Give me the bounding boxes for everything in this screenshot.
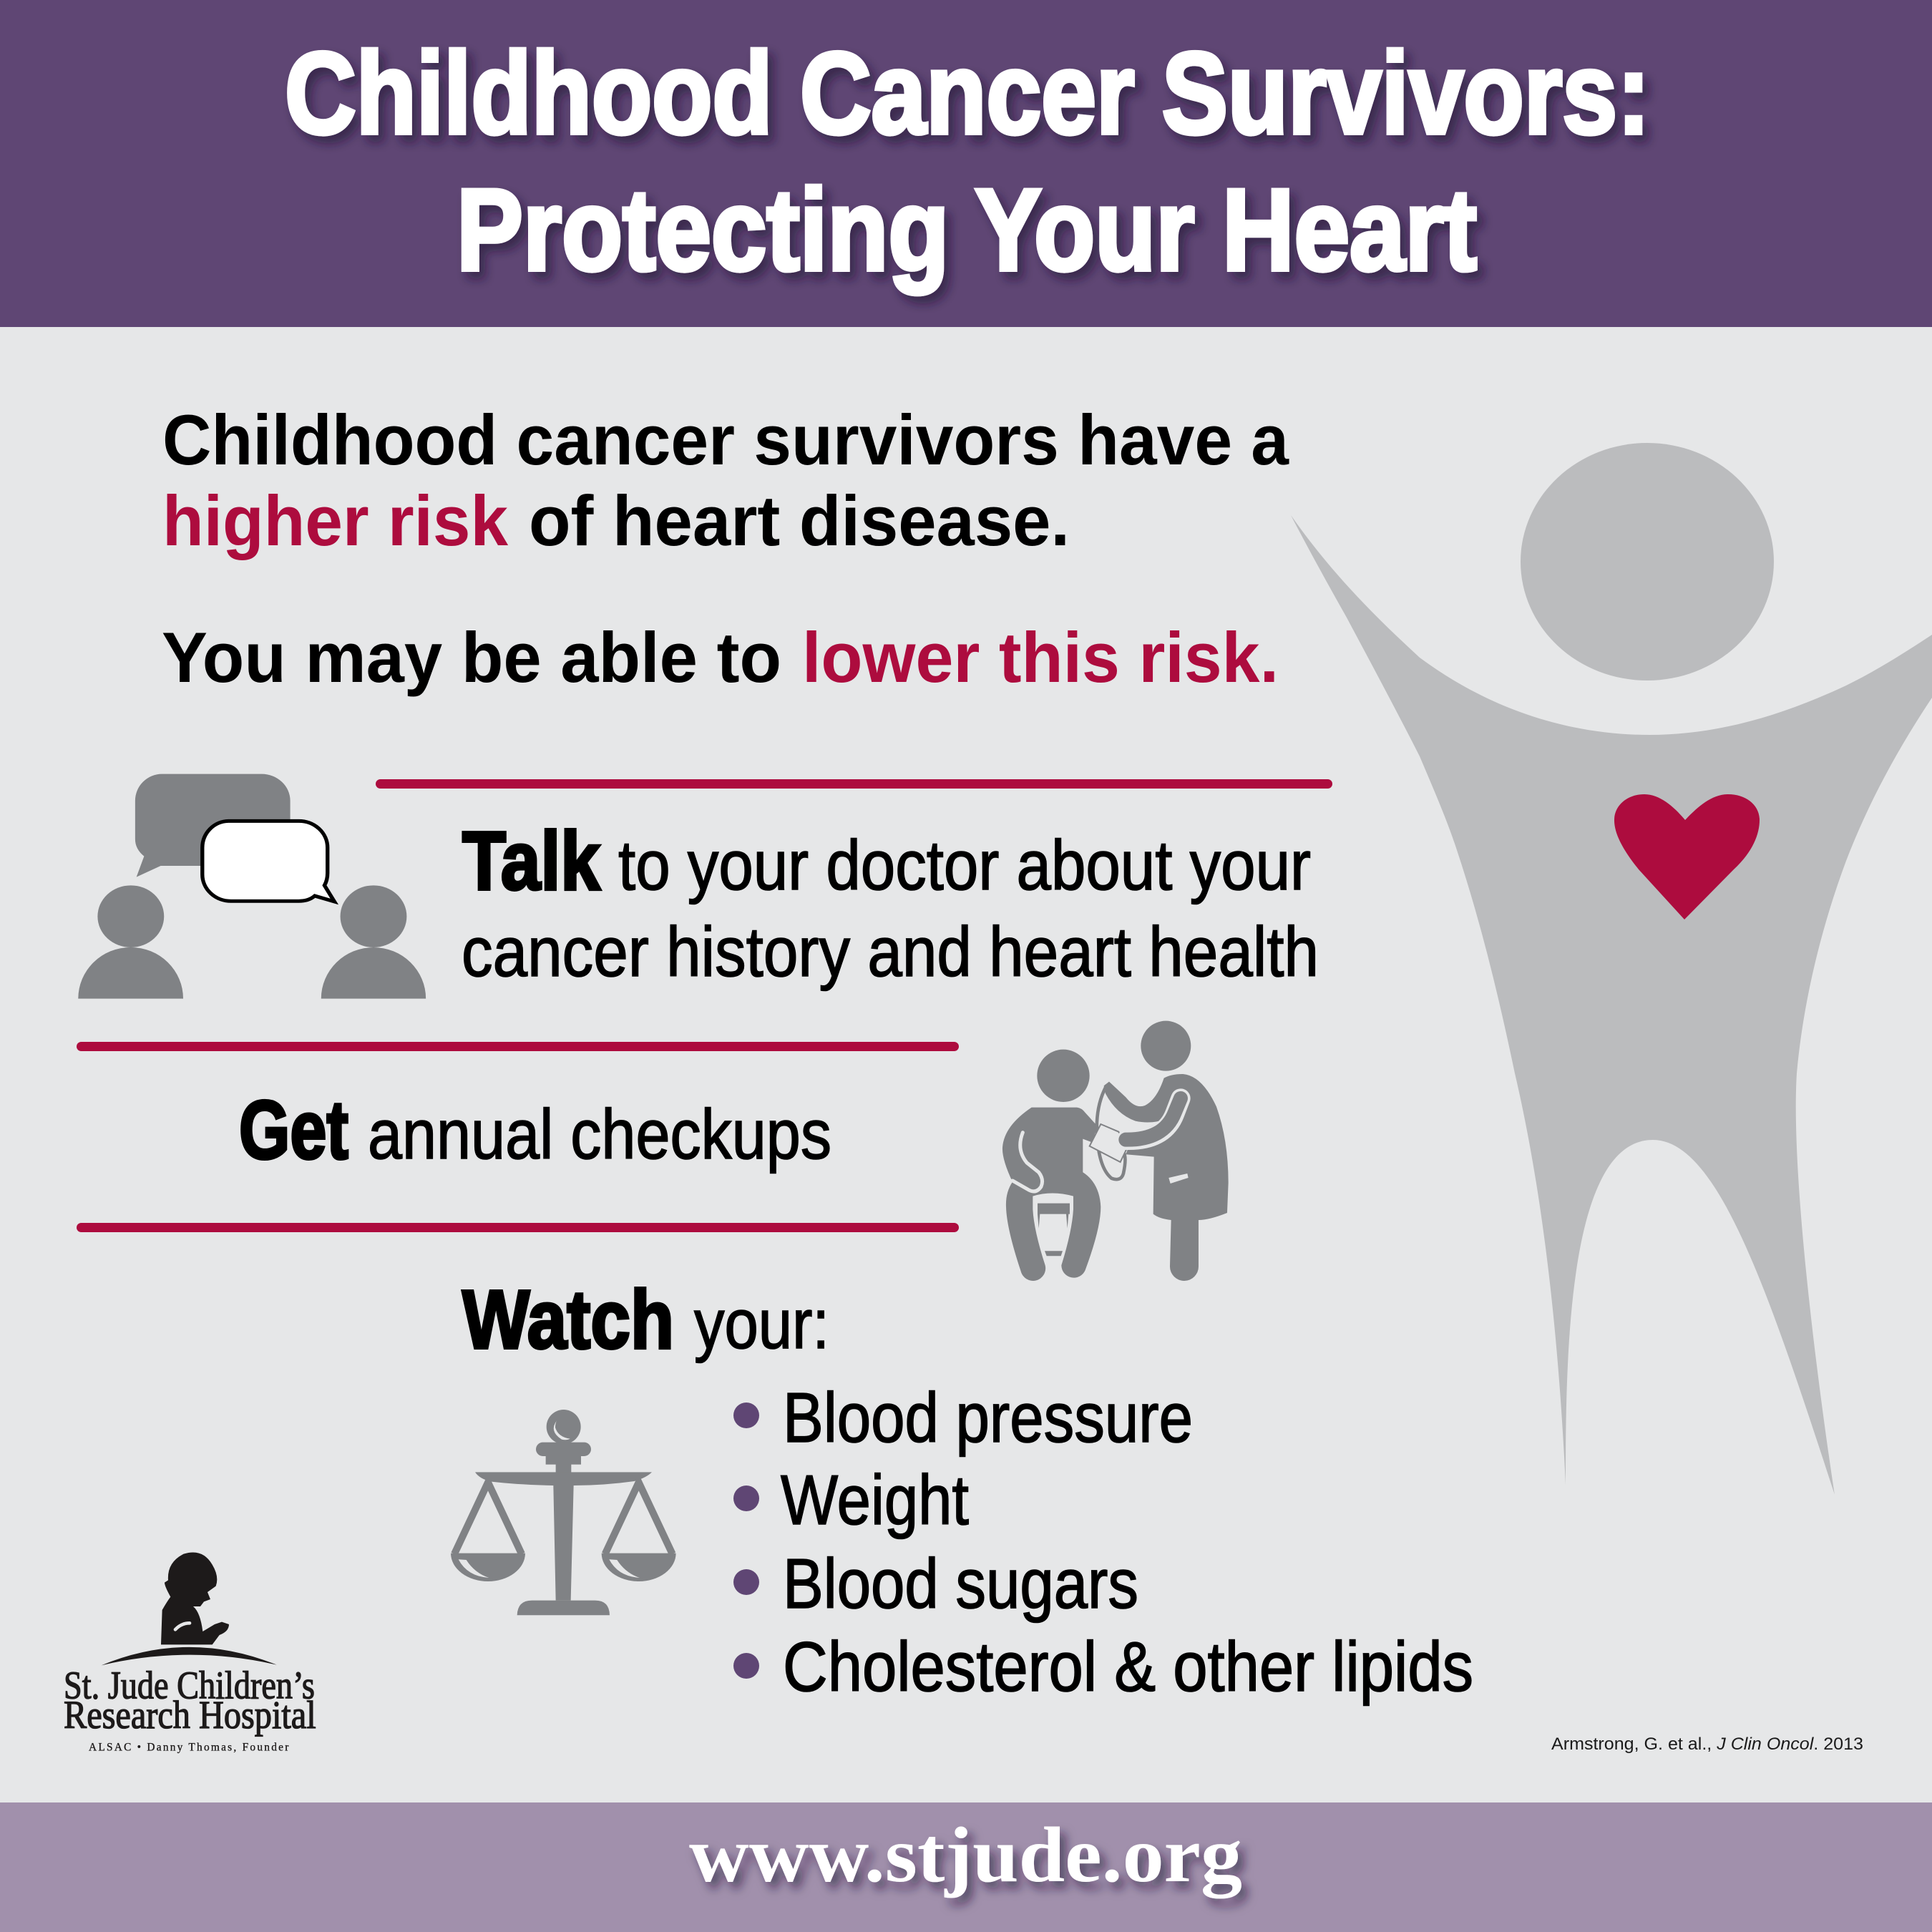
bullet list bbox=[733, 1378, 1473, 1706]
icon: balance scale bbox=[451, 1410, 676, 1615]
talk text: Talk bbox=[462, 814, 600, 907]
title: Protecting Your Heart bbox=[457, 165, 1477, 295]
icon: doctor and patient bbox=[1002, 1021, 1229, 1281]
panel: header band bbox=[0, 0, 1932, 327]
intro text bbox=[162, 400, 1289, 697]
citation: Armstrong, G. et al., J Clin Oncol. 2013 bbox=[1551, 1735, 1863, 1754]
talk text: cancer history and heart health bbox=[462, 912, 1319, 991]
title: Childhood Cancer Survivors: bbox=[285, 29, 1650, 158]
bullet list: Blood sugars bbox=[783, 1544, 1138, 1623]
get checkups text: annual checkups bbox=[368, 1095, 831, 1174]
icon: heart bbox=[1614, 794, 1760, 919]
get checkups text: Get bbox=[239, 1083, 348, 1176]
logo: St. Jude Children's Research Hospital: St. Jude Children’s bbox=[64, 1663, 315, 1707]
intro text: You may be able to bbox=[162, 618, 781, 697]
logo: St. Jude Children's Research Hospital bbox=[64, 1552, 316, 1754]
title bbox=[285, 29, 1650, 295]
watch heading bbox=[462, 1273, 829, 1366]
website url: www.stjude.org bbox=[689, 1811, 1242, 1898]
talk text bbox=[462, 814, 1319, 991]
bullet list: Cholesterol & other lipids bbox=[783, 1627, 1473, 1706]
intro text: of heart disease. bbox=[529, 481, 1070, 560]
get checkups text bbox=[239, 1083, 831, 1176]
intro text: higher risk bbox=[162, 481, 509, 560]
intro text: lower this risk. bbox=[802, 618, 1279, 697]
panel: footer band bbox=[0, 1802, 1932, 1932]
icon: two people talking bbox=[78, 774, 426, 999]
icon: large figure with arms raised bbox=[1291, 443, 1932, 1495]
bullet list: Blood pressure bbox=[783, 1378, 1193, 1457]
talk text: to your doctor about your bbox=[618, 826, 1311, 904]
logo: St. Jude Children's Research Hospital: Research Hospital bbox=[64, 1693, 316, 1737]
watch heading: Watch bbox=[462, 1273, 674, 1366]
bullet list: Weight bbox=[781, 1460, 969, 1539]
logo: St. Jude Children's Research Hospital: ALSAC • Danny Thomas, Founder bbox=[89, 1742, 288, 1754]
intro text: Childhood cancer survivors have a bbox=[162, 400, 1289, 479]
watch heading: your: bbox=[694, 1284, 829, 1363]
